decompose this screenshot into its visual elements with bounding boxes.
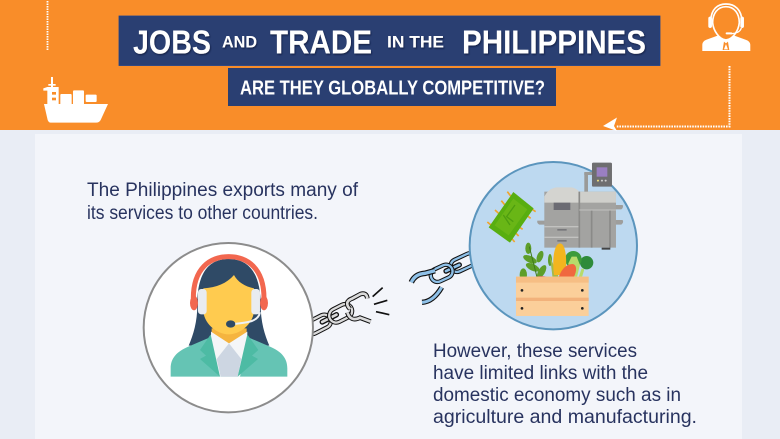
text block: limited links: agriculture and manufacturing. xyxy=(433,407,697,428)
icon: circuit board xyxy=(487,192,536,243)
hair xyxy=(189,259,269,346)
arrow: dotted connector from headset icon xyxy=(603,66,730,131)
suit xyxy=(171,337,287,377)
title banner: IN THE xyxy=(387,34,444,52)
text block: services exports: its services to other countries. xyxy=(87,203,318,224)
text block: services exports xyxy=(87,180,359,224)
text block: limited links: domestic economy such as in xyxy=(433,385,681,406)
icon: headset agent xyxy=(702,4,750,51)
icon: broken chain right xyxy=(411,251,478,302)
headset band xyxy=(193,257,264,298)
panel: sectors circle xyxy=(470,162,637,329)
title banner: PHILIPPINES xyxy=(462,24,646,60)
panel: body background xyxy=(35,134,742,439)
title banner: TRADE xyxy=(270,24,372,60)
icon: vegetable crate xyxy=(516,243,593,316)
microphone xyxy=(234,312,260,324)
ear cups xyxy=(198,289,207,314)
dotted line: top left xyxy=(46,1,48,51)
title banner: JOBS xyxy=(133,24,211,60)
subtitle banner: ARE THEY GLOBALLY COMPETITIVE? xyxy=(240,78,545,100)
icon: cargo ship xyxy=(43,77,108,123)
text block: limited links: have limited links with the xyxy=(433,363,648,384)
text block: services exports: The Philippines exports many of xyxy=(87,180,359,201)
title banner xyxy=(119,16,660,66)
neck and face xyxy=(212,328,247,345)
subtitle banner xyxy=(228,68,556,106)
text block: limited links: However, these services xyxy=(433,341,637,362)
title banner: AND xyxy=(222,34,257,52)
text block: limited links xyxy=(433,341,697,428)
panel: orange header xyxy=(0,0,780,130)
icon: printer machine xyxy=(537,163,623,250)
panel: call-center agent circle xyxy=(144,243,313,412)
icon: broken chain left xyxy=(303,288,389,336)
